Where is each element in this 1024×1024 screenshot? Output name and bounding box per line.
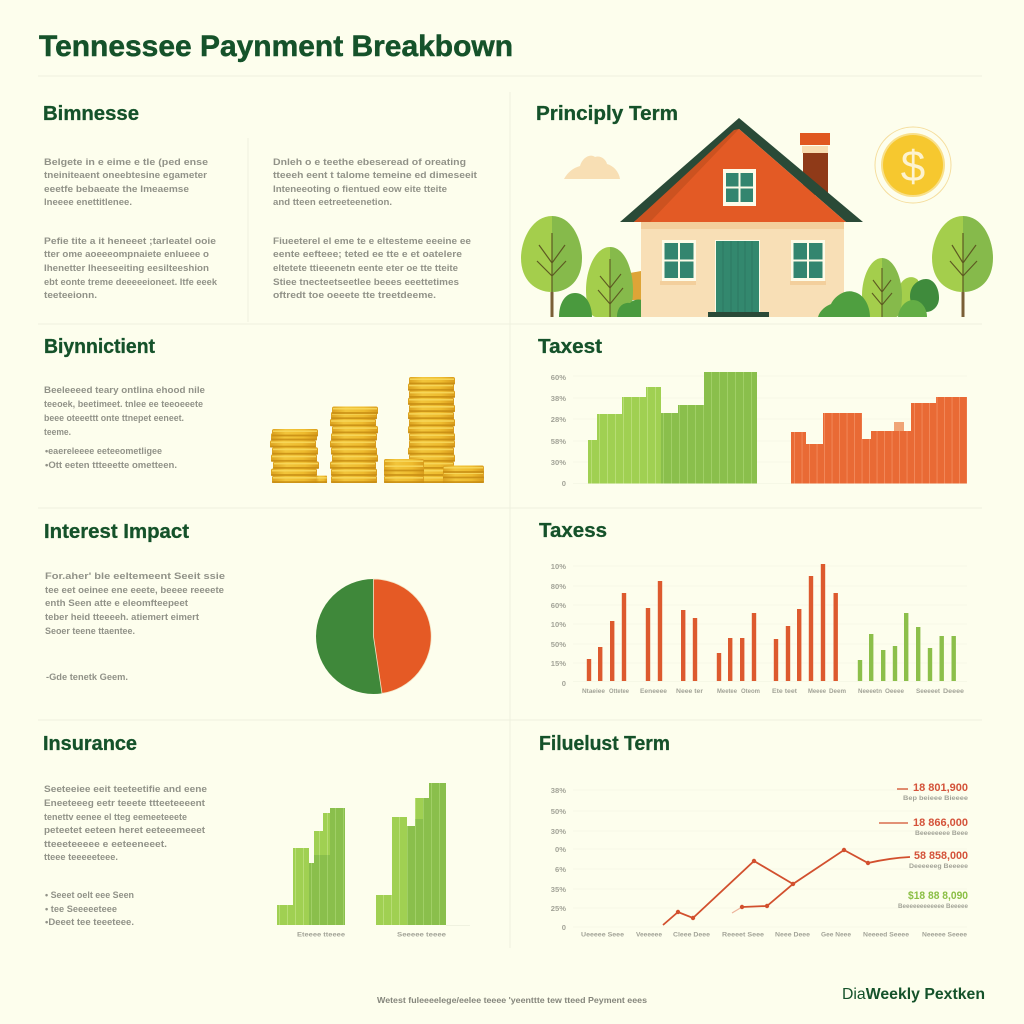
text block: right column: oftredt toe oeeete tte treetdeeme.: [273, 290, 436, 301]
icon: right window: [790, 240, 826, 285]
chart x labels: Ete teet: [772, 688, 798, 695]
text block: description: -Gde tenetk Geem.: [46, 672, 128, 683]
icon: chimney: [800, 133, 830, 195]
text block: description: [44, 385, 205, 471]
icon: right tree large: [932, 216, 993, 317]
bar chart: red columns: [587, 564, 838, 681]
text block: description: For.aher' ble eeltemeent Seeit ssie: [45, 571, 225, 582]
text block: description: tteee teeeeeteee.: [44, 852, 118, 863]
chart axis labels: 80%: [551, 582, 566, 591]
callout: value two: [879, 817, 968, 837]
text block: description: tenettv eenee el tteg eemeeteeete: [44, 812, 187, 823]
coin stack 2: [330, 406, 378, 483]
chart axis labels: 30%: [551, 458, 566, 467]
chart x labels: Meeee: [808, 688, 826, 695]
line chart: series two: [732, 848, 910, 913]
chart x labels: Neee ter: [676, 688, 703, 695]
text block: description: teber heid tteeeeh. atiemert eimert: [45, 612, 200, 623]
chart x labels: Cleee Deee: [673, 932, 710, 938]
text block: description: • tee Seeeeeteee: [45, 904, 117, 915]
text block: right column: and tteen eetreeteenetion.: [273, 197, 392, 208]
text block: description: •eaereleeee eeteeometligee: [45, 446, 162, 457]
chart x labels: Ueeeee Seee: [581, 932, 624, 938]
footer brand: DiaWeekly Pextken: [842, 986, 985, 1003]
heading: Biynnictient: Biynnictient: [44, 336, 155, 358]
panel: taxes step bar charts: [538, 336, 967, 488]
chart axis labels: [551, 373, 967, 488]
chart baseline and labels: Seeeee teeee: [397, 932, 446, 938]
title: Tennessee Paynment Breakbown: [39, 30, 513, 63]
text block: left column: tneiniteaent oneebtesine egameter: [44, 170, 207, 181]
icon: left window: [660, 240, 696, 285]
heading: Insurance: Insurance: [43, 733, 137, 755]
icon: dollar coin: [875, 127, 951, 203]
text block: right column: [273, 157, 478, 301]
bar chart: green: [588, 372, 757, 484]
text block: description: [45, 571, 225, 683]
chart axis labels: 10%: [551, 620, 566, 629]
panel: principal term house illustration: [521, 103, 993, 317]
coin stack 1: [270, 429, 319, 483]
callout: value one: 18 801,900: [913, 782, 968, 794]
chart x labels: Deeee: [943, 688, 964, 695]
bar chart: insurance left: [277, 808, 345, 925]
text block: description: Beeleeeed teary ontlina ehood nile: [44, 385, 205, 396]
chart axis labels: 38%: [551, 394, 566, 403]
text block: left column: Ihenetter lheeseeiting eesilteeshion: [44, 263, 209, 274]
coin stack 5: [443, 466, 484, 483]
icon: cloud: [564, 156, 620, 179]
chart x labels: Reeeet Seee: [722, 932, 764, 938]
panel: business text: [43, 103, 478, 301]
chart x labels: Neeeee Seeee: [922, 932, 967, 938]
text block: right column: eltetete ttieeenetn eente eter oe tte tteite: [273, 263, 458, 274]
callout: value two: 18 866,000: [913, 817, 968, 829]
chart axis labels: [551, 786, 967, 932]
chart axis labels: 15%: [551, 659, 566, 668]
callout: value four: [898, 890, 968, 910]
panel: coin stacks section: [44, 336, 484, 483]
text block: left column: Belgete in e eime e tle (ped ense: [44, 157, 208, 168]
chart x labels: [581, 932, 967, 938]
text block: description: [44, 784, 207, 928]
chart axis labels: 50%: [551, 640, 566, 649]
heading: Filuelust Term: Filuelust Term: [539, 733, 670, 755]
bar chart: green columns: [858, 613, 956, 681]
text block: left column: eeetfe bebaeate the Imeaemse: [44, 184, 189, 195]
chart x labels: Neee Deee: [775, 932, 810, 938]
text block: right column: Stiee tnecteetseetlee beees eeettetimes: [273, 277, 459, 288]
panel: taxes column chart: [539, 520, 967, 695]
chart axis labels: 0: [562, 479, 566, 488]
chart axis labels: 0: [562, 923, 566, 932]
callout: value one: [897, 782, 968, 802]
chart axis labels: 10%: [551, 562, 566, 571]
callout: value four: Beeeeeeeeeeee Beeeee: [898, 903, 968, 910]
bar chart: insurance right: [376, 783, 446, 925]
heading: Taxest: Taxest: [538, 336, 602, 358]
chart axis labels: 0: [562, 679, 566, 688]
text block: right column: Dnleh o e teethe ebeseread of oreating: [273, 157, 466, 168]
text block: description: tee eet oeinee ene eeete, beeee reeeete: [45, 585, 224, 596]
text block: left column: teeteeionn.: [44, 290, 97, 301]
chart x labels: Oeeee: [885, 688, 904, 695]
text block: right column: eente eefteee; teted ee tte e et oatelere: [273, 249, 462, 260]
icon: left tree large: [521, 216, 582, 317]
chart axis labels: [551, 562, 967, 688]
text block: right column: tteeeh eent t talome temeine ed dimeseeit: [273, 170, 478, 181]
callout: value three: Deeeeeeg Beeeee: [909, 863, 968, 870]
icon: attic window: [723, 169, 756, 206]
chart x labels: Meetee: [717, 688, 737, 695]
text block: description: tteeeteeeee e eeteeneeet.: [44, 839, 167, 850]
chart axis labels: 60%: [551, 373, 566, 382]
callout: value three: 58 858,000: [914, 850, 968, 862]
chart x labels: Neeeetn: [858, 688, 882, 695]
icon: house wall: [641, 222, 844, 317]
heading: Principly Term: Principly Term: [536, 103, 678, 125]
icon: right bushes and small tree: [818, 258, 939, 317]
chart x labels: Ntaeiee: [582, 688, 605, 695]
chart axis labels: 58%: [551, 437, 566, 446]
icon: door: [708, 240, 769, 317]
text block: description: Seoer teene ttaentee.: [45, 626, 135, 637]
text block: left column: ebt eonte treme deeeeeioneet. Itfe eeek: [44, 277, 218, 288]
icon: roof: [620, 118, 863, 222]
text block: description: Eneeteeeg eetr teeete ttteeteeeent: [44, 798, 206, 809]
heading: Interest Impact: Interest Impact: [44, 521, 189, 543]
icon: dollar coin: $: [901, 142, 925, 191]
chart axis labels: 0%: [555, 845, 566, 854]
chart x labels: Neeeed Seeee: [863, 932, 909, 938]
chart axis labels: 6%: [555, 865, 566, 874]
chart x labels: Oteom: [741, 688, 760, 695]
text block: right column: Inteneeoting o fientued eow eite tteite: [273, 184, 447, 195]
callout: value four: $18 88 8,090: [908, 890, 968, 902]
footer note: Wetest fuleeeelege/eelee teeee 'yeenttte tew tteed Peyment eees: [377, 995, 647, 1005]
chart axis labels: 35%: [551, 885, 566, 894]
chart x labels: Ottetee: [609, 688, 629, 695]
callout: value three: [909, 850, 968, 870]
text block: left column: lneeee enettitlenee.: [44, 197, 132, 208]
chart axis labels: 60%: [551, 601, 566, 610]
chart x labels: Eeneeee: [640, 688, 667, 695]
chart x labels: Gee Neee: [821, 932, 851, 938]
text block: left column: Pefie tite a it heneeet ;tarleatel ooie: [44, 236, 216, 247]
chart axis labels: 50%: [551, 807, 566, 816]
bar chart: orange: [791, 397, 967, 484]
text block: description: beee oteeettt onte ttnepet eeneet.: [44, 413, 184, 424]
chart x labels: Veeeeee: [636, 932, 662, 938]
text block: description: teeme.: [44, 427, 71, 438]
callout: value two: Beeeeeeee Beee: [915, 830, 968, 837]
text block: left column: [44, 157, 218, 301]
text block: left column: tter ome aoeeeompnaiete enlueee o: [44, 249, 209, 260]
text block: description: enth Seen atte e eleomfteepeet: [45, 598, 189, 609]
chart x labels: [582, 688, 964, 695]
text block: description: • Seeet oelt eee Seen: [45, 890, 134, 901]
icon: coin stacks: [270, 377, 484, 483]
chart baseline and labels: [297, 926, 470, 938]
chart axis labels: 25%: [551, 904, 566, 913]
heading: Taxess: Taxess: [539, 520, 607, 542]
coin stack 4: [384, 459, 424, 483]
heading: Bimnesse: Bimnesse: [43, 103, 139, 125]
icon: left bushes: [559, 293, 651, 317]
text block: right column: Fiueeterel el eme te e eltesteme eeeine ee: [273, 236, 471, 247]
pie chart: [316, 579, 431, 694]
chart axis labels: 28%: [551, 415, 566, 424]
text block: description: peteetet eeteen heret eeteeemeeet: [44, 825, 206, 836]
text block: description: teeoek, beetimeet. tnlee ee teeoeeete: [44, 399, 203, 410]
chart axis labels: 30%: [551, 827, 566, 836]
coin stack 3: [408, 377, 455, 483]
small coin: [316, 476, 327, 483]
chart axis labels: 38%: [551, 786, 566, 795]
panel: interest impact: [44, 521, 431, 694]
text block: description: •Ott eeten ttteeette ometteen.: [45, 460, 177, 471]
text block: description: •Deeet tee teeeteee.: [45, 917, 134, 928]
chart x labels: Deem: [829, 688, 846, 695]
panel: insurance: [43, 733, 470, 938]
line chart: series one: [663, 859, 793, 925]
chart x labels: Seeeeet: [916, 688, 941, 695]
callout: value one: Bep beieee Bieeee: [903, 795, 968, 802]
text block: description: Seeteeiee eeit teeteetifie and eene: [44, 784, 207, 795]
chart baseline and labels: Eteeee tteeee: [297, 932, 345, 938]
panel: full term line chart: [539, 733, 968, 938]
icon: left tree small: [586, 247, 641, 317]
